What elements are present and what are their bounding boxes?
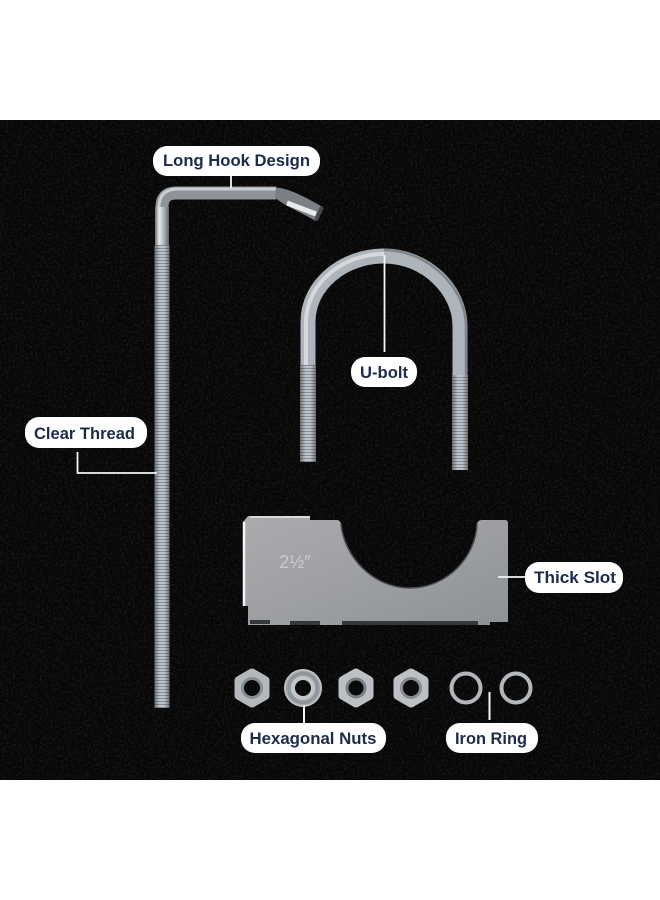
- label: U-bolt: U-bolt: [360, 363, 408, 382]
- label: Hexagonal Nuts: Hexagonal Nuts: [250, 729, 376, 748]
- label: Thick Slot: Thick Slot: [534, 568, 616, 587]
- label: Long Hook Design: Long Hook Design: [163, 151, 310, 170]
- label: Hexagonal Nuts: [241, 723, 386, 753]
- leader line: iron ring: [488, 692, 490, 720]
- long hook bolt: [154, 188, 323, 708]
- iron rings: [452, 674, 530, 702]
- panel: black leather background: [0, 120, 660, 780]
- hexagonal nuts: [239, 669, 424, 707]
- U-bolt: [300, 250, 468, 470]
- leader line: long hook: [230, 176, 232, 188]
- leader line: clear thread: [78, 452, 157, 473]
- label: U-bolt: [351, 357, 417, 387]
- plate size marking: 2½″: [279, 552, 311, 572]
- label: Thick Slot: [525, 562, 623, 593]
- label: Iron Ring: [446, 723, 538, 753]
- label: Clear Thread: Clear Thread: [34, 424, 135, 443]
- label: Long Hook Design: [153, 146, 320, 176]
- slotted clamp plate: [243, 516, 508, 625]
- label: Iron Ring: Iron Ring: [455, 729, 527, 748]
- leader line: thick slot: [498, 576, 525, 578]
- leader line: U-bolt: [384, 255, 386, 352]
- label: Clear Thread: [25, 417, 147, 448]
- leader line: hexagonal nuts: [303, 705, 305, 723]
